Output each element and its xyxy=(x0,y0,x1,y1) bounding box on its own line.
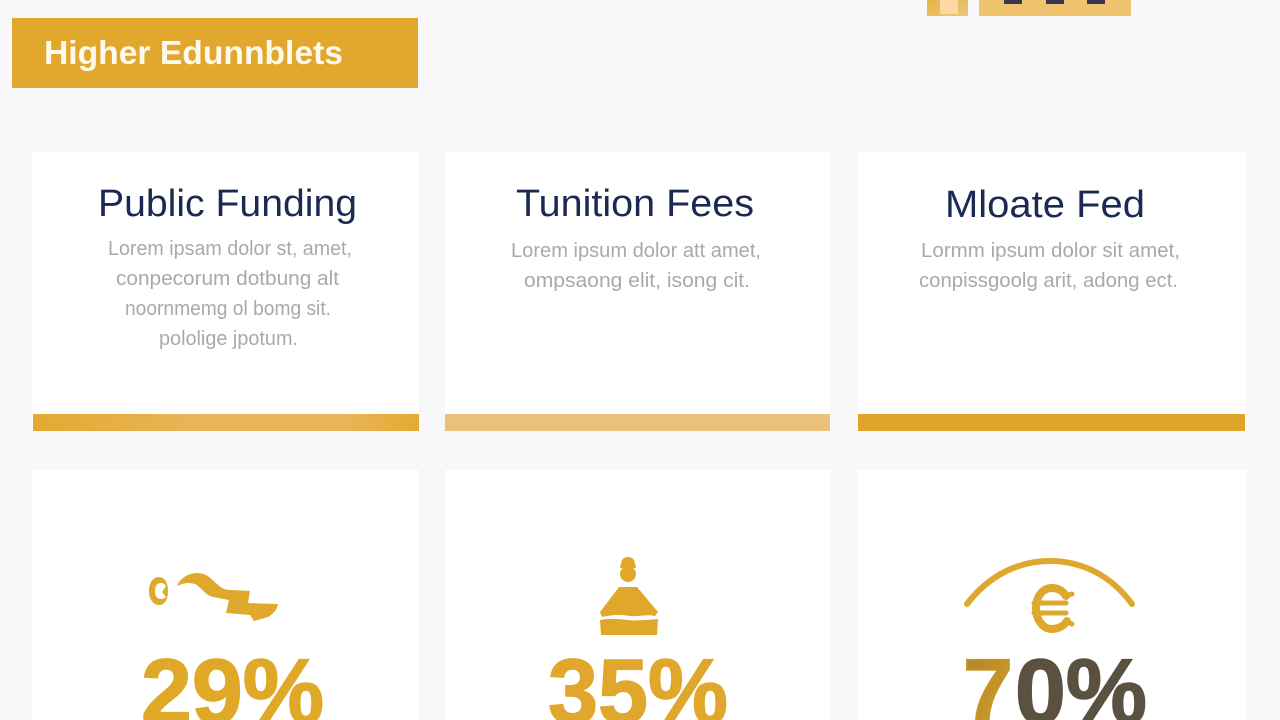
text block: public funding: noornmemg ol bomg sit. xyxy=(125,298,331,320)
panel: tuition fees xyxy=(445,152,830,431)
panel: private fees xyxy=(858,152,1246,431)
text block: tuition fees: ompsaong elit, isong cit. xyxy=(524,270,750,292)
panel: stat 35 percent xyxy=(445,470,830,720)
icon: ring and ribbon xyxy=(149,573,278,621)
accent bar: private fees xyxy=(858,414,1245,431)
icon: flask xyxy=(600,557,658,635)
heading: public funding: Public Funding xyxy=(98,183,357,225)
top decoration icon xyxy=(927,0,1131,16)
text block: public funding xyxy=(108,238,352,350)
icon: arc and euro coin xyxy=(967,561,1132,629)
text block: private fees xyxy=(919,240,1180,292)
panel: stat 29 percent xyxy=(32,470,419,720)
text block: public funding: pololige jpotum. xyxy=(159,328,298,350)
header banner xyxy=(12,18,418,88)
panel: public funding xyxy=(32,152,419,431)
header banner: Higher Edunnblets xyxy=(44,34,343,71)
text block: private fees: conpissgoolg arit, adong ect. xyxy=(919,270,1178,292)
text block: public funding: conpecorum dotbung alt xyxy=(116,268,339,290)
text block: public funding: Lorem ipsam dolor st, amet, xyxy=(108,238,352,260)
text block: tuition fees xyxy=(511,240,761,292)
accent bar: tuition fees xyxy=(445,414,830,431)
heading: private fees: Mloate Fed xyxy=(945,184,1145,226)
text block: private fees: Lormm ipsum dolor sit amet, xyxy=(921,240,1180,262)
heading: tuition fees: Tunition Fees xyxy=(516,183,754,225)
text block: tuition fees: Lorem ipsum dolor att amet, xyxy=(511,240,761,262)
panel: stat 70 percent xyxy=(858,470,1246,720)
accent bar: public funding xyxy=(33,414,419,431)
